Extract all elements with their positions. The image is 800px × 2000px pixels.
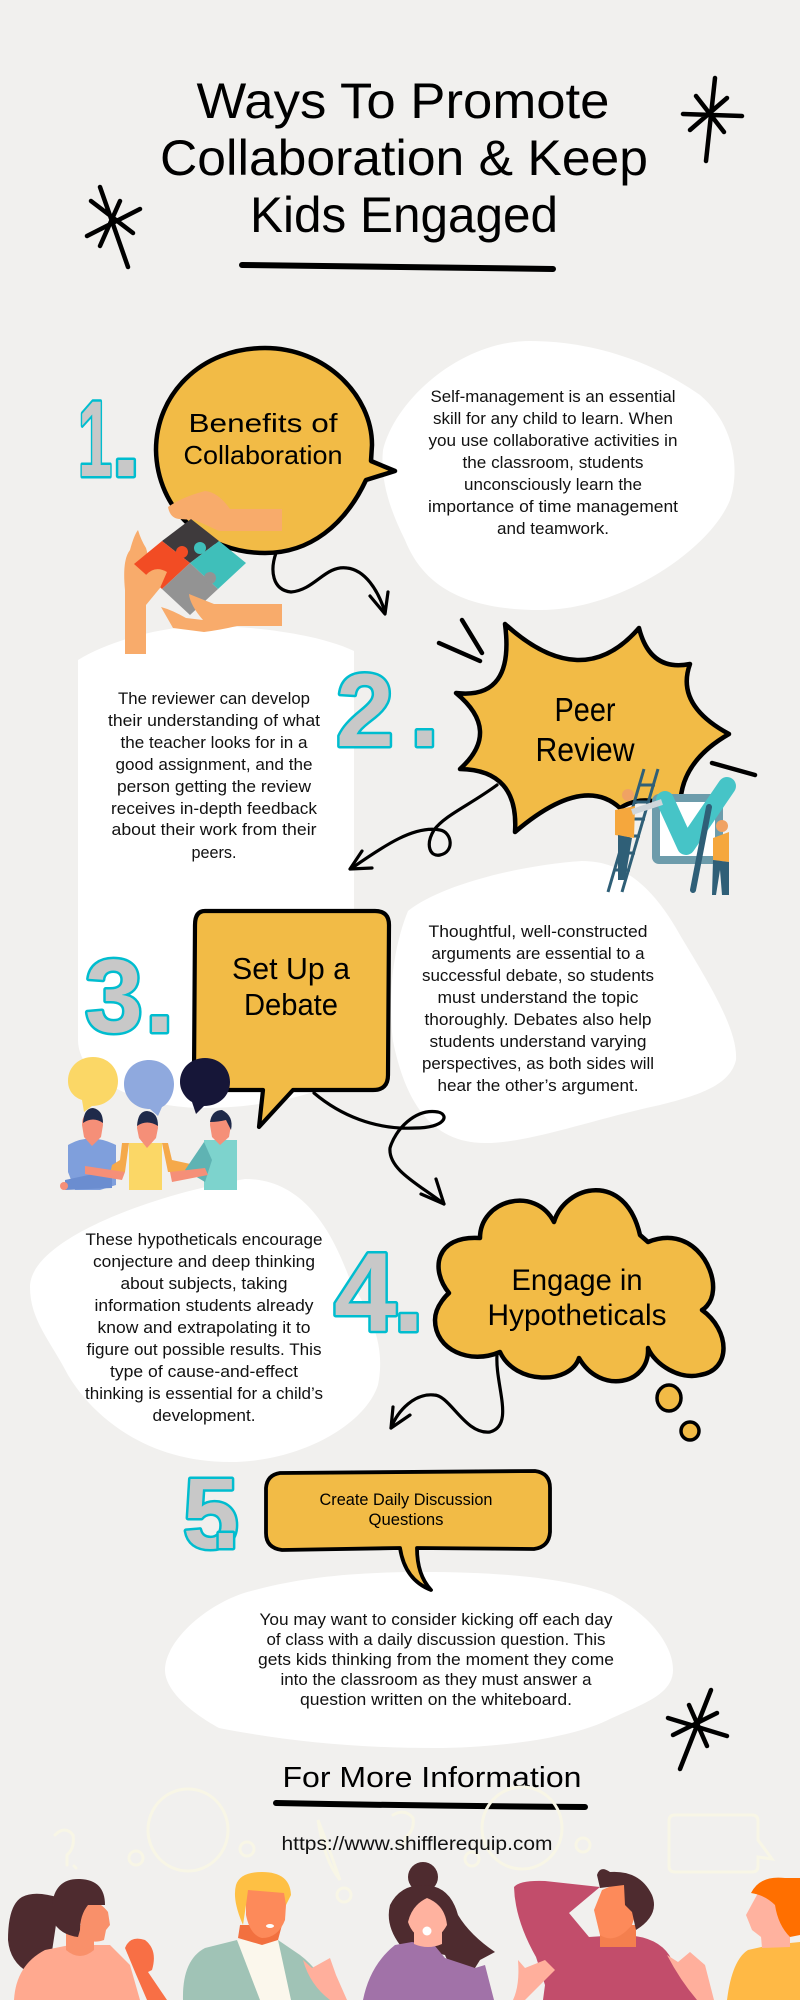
heading bubble 3: Set Up a Debate: [194, 911, 389, 1127]
heading bubble 5: Create Daily Discussion Questions: [266, 1471, 550, 1590]
panel: text blob 4: information students already: [94, 1297, 314, 1315]
panel: text blob 2: their understanding of what: [108, 712, 320, 730]
panel: text blob 4: [30, 1179, 380, 1462]
panel: text blob 3: must understand the topic: [438, 989, 638, 1007]
heading cloud 4: Engage in Hypotheticals: Engage in: [512, 1264, 642, 1297]
panel: text blob 4: thinking is essential for a child’s: [85, 1385, 323, 1403]
panel: text blob 1: and teamwork.: [497, 520, 609, 538]
person 3: woman in purple: [363, 1862, 495, 2000]
person 5: woman in yellow: [667, 1878, 800, 2000]
panel: text blob 3: successful debate, so students: [422, 967, 654, 985]
panel: text blob 3: perspectives, as both sides will: [422, 1055, 654, 1073]
title: [160, 73, 648, 243]
title: Kids Engaged: [250, 187, 558, 243]
faint background doodles: [55, 1789, 772, 1902]
panel: text blob 2: peers.: [192, 844, 236, 862]
heading bubble 1: Benefits of Collaboration: Collaboration: [184, 440, 342, 470]
panel: text blob 4: know and extrapolating it to: [98, 1319, 310, 1337]
heading burst 2: Peer Review: Review: [536, 731, 635, 768]
heading bubble 3: Set Up a Debate: Debate: [244, 987, 338, 1022]
number 3: 3: [85, 939, 143, 1055]
decorative burst lines: [439, 620, 755, 775]
panel: text blob 3: arguments are essential to a: [432, 945, 645, 963]
person 4: man in magenta with raised arm: [513, 1869, 699, 2000]
panel: text blob 2: about their work from their: [112, 821, 317, 839]
number 4: .: [393, 1230, 424, 1355]
panel: text blob 2: The reviewer can develop: [118, 690, 310, 708]
panel: text blob 2: receives in-depth feedback: [111, 800, 318, 818]
panel: text blob 5: question written on the whiteboard.: [300, 1691, 572, 1709]
panel: text blob 4: figure out possible results. This: [86, 1341, 322, 1359]
icon: star top right: [683, 78, 742, 161]
thought circle large: [657, 1385, 681, 1411]
panel: text blob 4: about subjects, taking: [120, 1275, 288, 1293]
panel: text blob 5: of class with a daily discussion question. This: [266, 1631, 606, 1649]
heading bubble 5: Create Daily Discussion Questions: Create Daily Discussion: [320, 1490, 492, 1509]
panel: text blob 3: [391, 861, 736, 1143]
panel: text blob 5: gets kids thinking from the moment they come: [258, 1651, 614, 1669]
panel: text blob 3: Thoughtful, well-constructed: [428, 923, 648, 941]
thought circle small: [681, 1422, 699, 1440]
panel: text blob 5: [165, 1572, 673, 1748]
icon: star left: [87, 187, 140, 267]
number 1: .: [111, 378, 141, 499]
heading: For More Information: For More Information: [282, 1762, 582, 1794]
panel: text blob 4: These hypotheticals encourage: [86, 1231, 322, 1249]
number 4: 4: [334, 1230, 396, 1355]
title: Collaboration & Keep: [160, 130, 648, 186]
heading bubble 1: Benefits of Collaboration: Benefits of: [188, 408, 338, 438]
panel: text blob 3: students understand varying: [430, 1033, 646, 1051]
number 2: .: [410, 653, 439, 769]
link text: https://www.shifflerequip.com: [282, 1834, 552, 1855]
panel: text blob 4: conjecture and deep thinking: [93, 1253, 315, 1271]
panel: text blob 2: the teacher looks for in a: [120, 734, 308, 752]
panel: text blob 1: you use collaborative activities in: [428, 432, 678, 450]
heading bubble 3: Set Up a Debate: Set Up a: [232, 951, 351, 986]
title: Ways To Promote: [196, 73, 610, 129]
icon: checklist with workers: [608, 769, 729, 895]
icon: hands with puzzle: [124, 491, 282, 654]
heading bubble 1: Benefits of Collaboration: [156, 348, 395, 553]
arrow 2: [350, 785, 497, 869]
person 1: woman in pink: [8, 1879, 167, 2000]
panel: text blob 4: development.: [152, 1407, 256, 1425]
panel: text blob 3: hear the other’s argument.: [438, 1077, 638, 1095]
panel: text blob 1: [382, 341, 735, 610]
panel: text blob 3: thoroughly. Debates also help: [424, 1011, 652, 1029]
panel: text blob 1: the classroom, students: [462, 454, 644, 472]
number 3: .: [145, 939, 174, 1055]
number 5: .: [212, 1458, 240, 1570]
panel: text blob 2: person getting the review: [117, 778, 311, 796]
number 1: 1: [78, 378, 112, 499]
panel: text blob 1: Self-management is an essential: [430, 388, 676, 406]
heading cloud 4: Engage in Hypotheticals: Hypotheticals: [488, 1299, 666, 1332]
heading burst 2: Peer Review: [456, 624, 729, 832]
panel: text blob 2: good assignment, and the: [116, 756, 312, 774]
arrow 3: [314, 1093, 444, 1204]
icon: three people talking: [60, 1057, 237, 1190]
heading bubble 5: Create Daily Discussion Questions: Questions: [368, 1510, 444, 1529]
arrow 4: [391, 1355, 503, 1432]
panel: text blob 1: unconsciously learn the: [464, 476, 642, 494]
icon: star bottom: [668, 1690, 727, 1769]
arrow 1: [273, 553, 388, 614]
heading cloud 4: Engage in Hypotheticals: [435, 1190, 724, 1381]
panel: text blob 4: type of cause-and-effect: [110, 1363, 298, 1381]
number 2: 2: [336, 653, 394, 769]
number 5: 5: [183, 1458, 239, 1570]
panel: text blob 5: into the classroom as they must answer a: [280, 1671, 592, 1689]
panel: text blob 2: [78, 626, 354, 1108]
panel: text blob 1: importance of time management: [428, 498, 678, 516]
heading burst 2: Peer Review: Peer: [554, 691, 616, 728]
person 2: blond man in green jacket: [183, 1872, 347, 2000]
panel: text blob 1: skill for any child to learn. When: [433, 410, 673, 428]
panel: text blob 5: You may want to consider kicking off each day: [260, 1611, 613, 1629]
